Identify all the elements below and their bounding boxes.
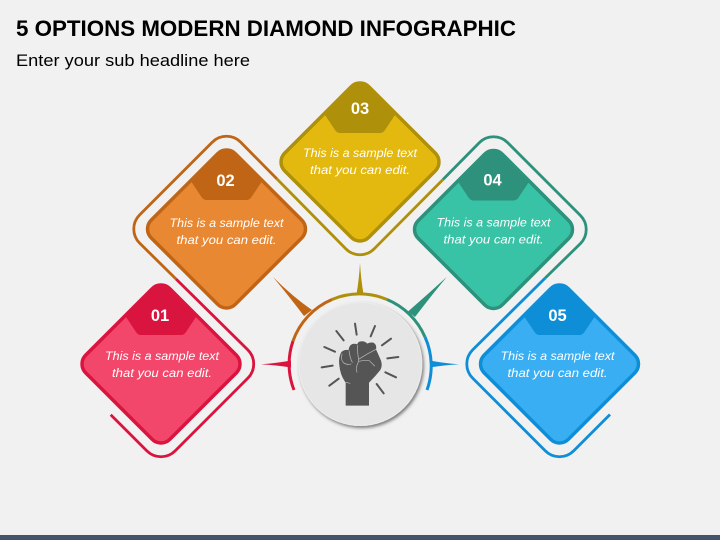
panel: option 03 [276,78,444,246]
center circle [299,302,422,426]
bracket: option 03 [277,179,443,255]
panel: option 03: This is a sample text [303,146,418,160]
panel: option 02 [142,145,311,313]
subtitle: Enter your sub headline here [16,52,250,70]
panel: option 03: 03 [351,100,369,118]
panel: option 05: This is a sample text [500,349,615,363]
title: 5 OPTIONS MODERN DIAMOND INFOGRAPHIC [16,16,516,41]
arc and spike: option 01 [261,341,294,390]
bracket: option 02 [134,136,277,279]
icon: raised fist [322,324,398,406]
arc and spike: option 05 [425,337,459,390]
panel: option 01 [77,280,245,448]
panel: option 03: that you can edit. [310,163,410,177]
panel: option 04 [409,145,578,314]
bracket: option 04 [443,137,586,278]
arc and spike: option 02 [273,277,332,341]
bracket: option 01 [111,279,254,457]
panel: option 02: 02 [216,172,235,190]
bracket: option 05 [467,278,610,457]
panel: option 02: that you can edit. [176,233,277,247]
panel: option 01: that you can edit. [112,366,212,380]
panel: option 05 [475,280,644,448]
panel: option 05: 05 [548,307,567,325]
panel: option 01: This is a sample text [105,349,220,363]
panel: option 04: 04 [483,172,502,190]
panel: option 01: 01 [151,307,169,325]
arc and spike: option 04 [387,277,447,337]
panel: option 02: This is a sample text [170,216,284,230]
panel: option 04: that you can edit. [443,232,544,246]
footer bar [0,535,720,540]
panel: option 04: This is a sample text [436,216,551,230]
panel: option 05: that you can edit. [507,366,608,380]
arc and spike: option 03 [332,263,387,300]
